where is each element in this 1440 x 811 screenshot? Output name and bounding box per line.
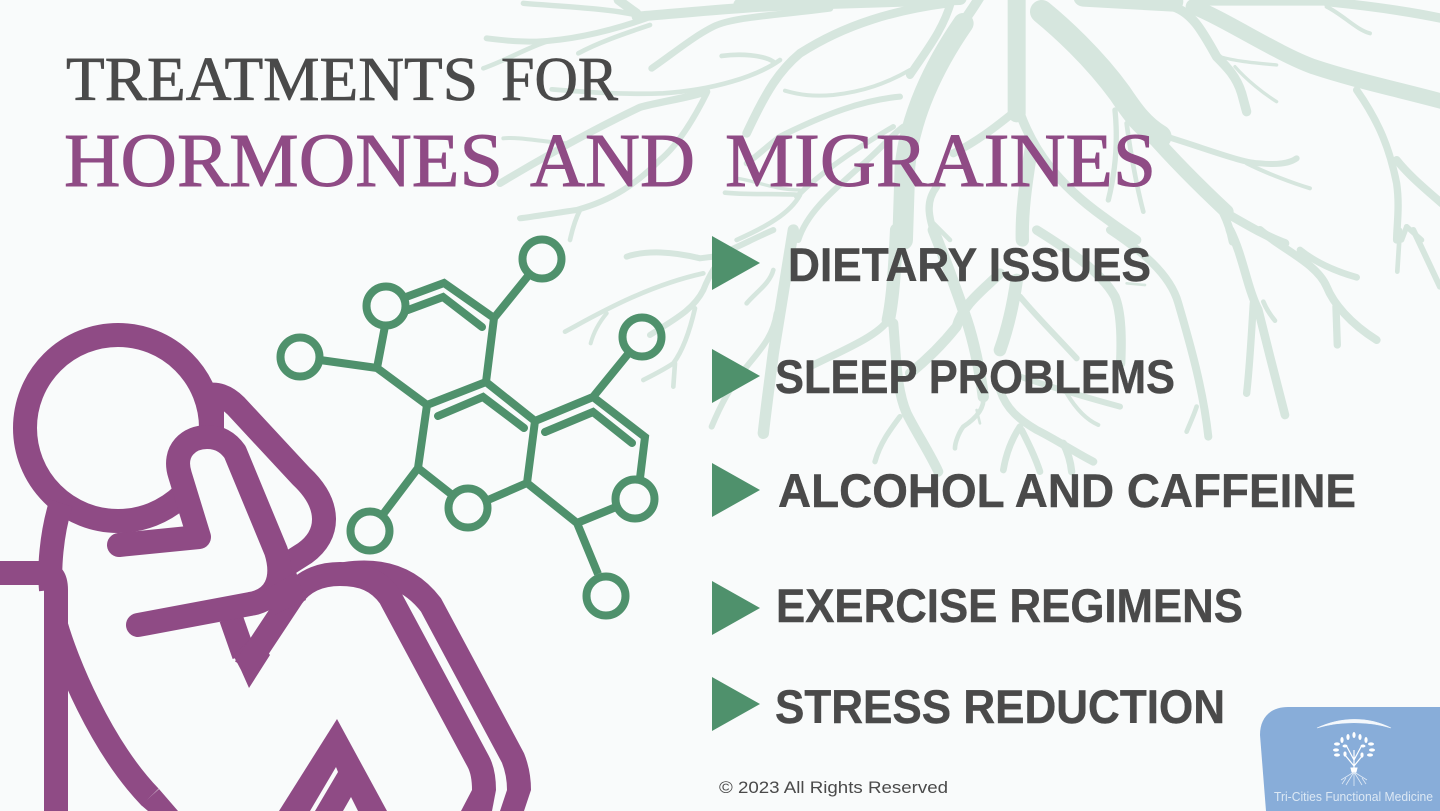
bullet: stress reduction: STRESS REDUCTION bbox=[775, 680, 1225, 733]
title line: treatments for: FOR bbox=[501, 46, 619, 114]
title line: hormones and migraines bbox=[64, 119, 1156, 203]
icon: molecule bbox=[280, 240, 662, 616]
bullet: dietary issues: DIETARY ISSUES bbox=[788, 238, 1151, 291]
logo tree bbox=[1333, 732, 1375, 786]
bullet: sleep problems: SLEEP PROBLEMS bbox=[775, 350, 1175, 403]
back and chair bbox=[0, 503, 150, 811]
head bbox=[25, 335, 211, 521]
title line: treatments for: TREATMENTS bbox=[66, 46, 478, 114]
title line: hormones and migraines: AND bbox=[530, 119, 695, 203]
title line: hormones and migraines: HORMONES bbox=[64, 119, 503, 203]
back of upper arm bbox=[203, 395, 324, 567]
icon: person with headache bbox=[0, 335, 531, 811]
hand and forearm bbox=[119, 437, 279, 625]
copyright: © 2023 All Rights Reserved bbox=[719, 778, 948, 797]
first leg bbox=[245, 574, 484, 790]
title line: hormones and migraines: MIGRAINES bbox=[725, 119, 1156, 203]
background: tree roots bbox=[483, 0, 1440, 472]
foot chevron bbox=[279, 719, 387, 811]
second leg bbox=[345, 572, 519, 790]
bullet: alcohol and caffeine: ALCOHOL AND CAFFEINE bbox=[778, 464, 1356, 517]
joint between forearm and knee bbox=[262, 572, 306, 615]
logo name: Tri-Cities Functional Medicine bbox=[1274, 790, 1433, 804]
bullet: exercise regimens: EXERCISE REGIMENS bbox=[776, 579, 1243, 632]
chest line to the knee bbox=[231, 618, 244, 655]
logo badge bbox=[1260, 707, 1440, 811]
logo arc bbox=[1317, 719, 1391, 728]
